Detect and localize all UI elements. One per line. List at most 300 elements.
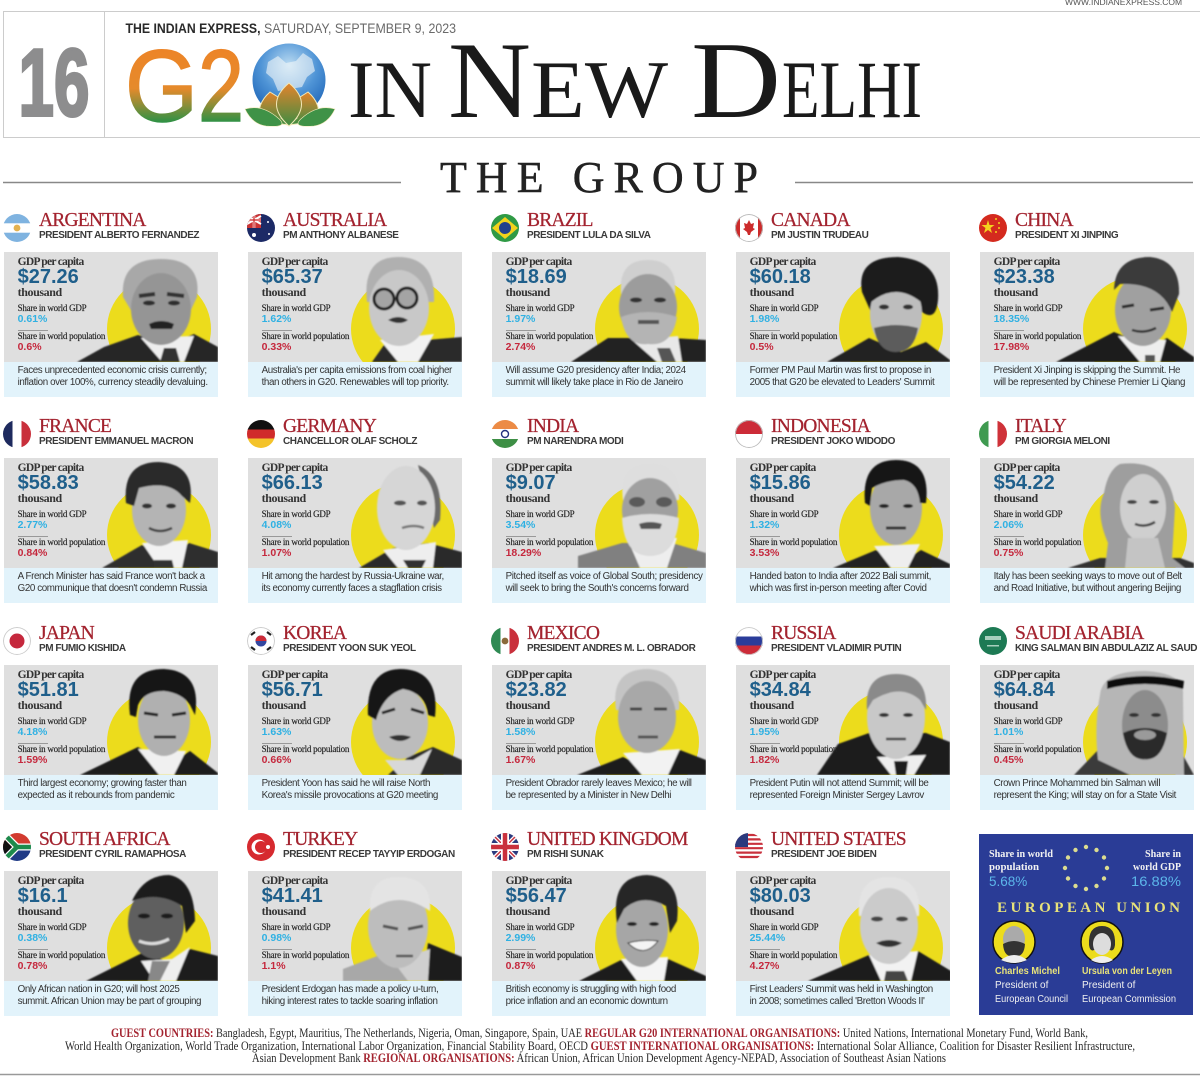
key figures: thousand [750,698,794,712]
note [492,362,706,397]
portrait: King Salman [980,665,1194,775]
key figures: 1.67% [506,754,535,766]
country name: ARGENTINA [39,210,146,230]
key figures: 3.53% [750,547,779,559]
flag: Korea [247,627,275,655]
icon: EU stars [1063,845,1109,891]
card: India [492,416,706,603]
key figures: GDP per capita [262,256,328,268]
portrait: Yoon [248,665,462,775]
key figures [506,871,616,981]
portrait: Charles Michel [993,921,1035,963]
key figures: 1.98% [750,313,779,325]
key figures: $64.84 [994,679,1055,701]
key figures: $15.86 [750,472,811,494]
leader: PRESIDENT EMMANUEL MACRON [39,436,193,447]
key figures: Share in world population [994,537,1081,547]
key figures: thousand [262,698,306,712]
stats panel [980,252,1194,362]
leader: PM ANTHONY ALBANESE [283,230,399,241]
key figures: 1.07% [262,547,291,559]
note [736,981,950,1016]
key figures: $54.22 [994,472,1055,494]
key figures: $18.69 [506,266,567,288]
key figures: Share in world population [18,331,105,341]
title: in New Delhi: EW [531,44,669,135]
key figures [506,665,616,775]
card: United Kingdom [488,829,728,1017]
stats panel [492,458,706,568]
portrait: Kishida [4,665,218,775]
key figures: 25.44% [750,932,785,944]
key figures: Share in world population [506,744,593,754]
key figures: Share in world GDP [18,716,86,726]
key figures: Share in world population [262,950,349,960]
leader: KING SALMAN BIN ABDULAZIZ AL SAUD [1015,643,1197,654]
key figures: GDP per capita [262,462,328,474]
key figures [262,462,350,559]
key figures: $80.03 [750,885,811,907]
key figures: 2.99% [506,932,535,944]
masthead [3,11,1200,140]
note [4,775,218,810]
portrait: Scholz [351,464,462,568]
key figures: Share in world population [750,537,837,547]
country name: AUSTRALIA [283,210,386,230]
leader: PRESIDENT LULA DA SILVA [527,230,651,241]
portrait: Biden [736,871,950,981]
key figures: GDP per capita [262,875,328,887]
key figures [750,256,838,353]
stats panel [4,458,218,568]
stats panel [248,458,462,568]
portrait: Obrador [492,665,706,775]
key figures: GDP per capita [750,669,816,681]
key figures [994,665,1104,775]
note: British economy is struggling with high food [506,984,676,994]
portrait: Meloni [980,458,1194,568]
key figures [750,665,860,775]
key figures: thousand [262,491,306,505]
note [736,362,950,397]
note: Handed baton to India after 2022 Bali summit, [750,570,931,582]
key figures: 18.35% [994,313,1029,325]
leader: PRESIDENT RECEP TAYYIP ERDOGAN [283,849,455,860]
country name: RUSSIA [771,622,836,644]
key figures: 1.62% [262,313,291,325]
key figures: Share in world population [506,950,593,960]
title: in New Delhi: D [691,20,781,140]
key figures: thousand [262,285,306,299]
title: in New Delhi: IN [348,44,432,135]
key figures: thousand [18,491,62,505]
key figures: thousand [750,904,794,918]
note [4,981,218,1016]
key figures: $23.82 [506,679,567,701]
G20 logo: 2 [198,29,244,140]
note: expected as it rebounds from pandemic [18,790,174,801]
key figures: Share in world GDP [750,716,818,726]
key figures: GDP per capita [750,462,816,474]
key figures: Share in world GDP [750,509,818,519]
key figures: thousand [506,698,550,712]
key figures: GDP per capita [750,875,816,887]
leader: PRESIDENT XI JINPING [1015,230,1118,241]
flag: United Kingdom [491,833,519,861]
note: which was first in-person meeting after Covid [750,583,927,594]
note: President Yoon has said he will raise North [262,778,430,788]
leader: PRESIDENT YOON SUK YEOL [283,643,416,654]
key figures: $56.47 [506,885,567,907]
note: President Obrador rarely leaves Mexico; he will [506,778,692,788]
key figures: Share in world population [994,744,1081,754]
key figures: 0.45% [994,754,1023,766]
card: China [979,210,1194,397]
stats panel [980,665,1194,775]
heading: European Union: EUROPEAN UNION [997,900,1180,916]
key figures: 4.18% [18,726,47,738]
card: Canada [735,210,950,397]
key figures [18,256,106,353]
key figures: 0.61% [18,313,47,325]
flag: Germany [247,420,275,448]
key figures: GDP per capita [994,462,1060,474]
key figures: $34.84 [750,679,811,701]
key figures: $16.1 [18,885,68,907]
card: Australia [247,210,462,397]
card: Italy [979,416,1194,603]
share in world GDP: world GDP [1133,861,1181,873]
key figures: $23.38 [994,266,1055,288]
share in world population: 5.68% [989,874,1027,889]
title: in New Delhi: ELHI [782,44,922,135]
caption: Charles Michel [995,966,1068,1005]
portrait: Sunak [492,871,706,981]
stats panel [248,252,462,362]
dateline: SATURDAY, SEPTEMBER 9, 2023 [264,21,456,36]
key figures: 1.82% [750,754,779,766]
key figures: Share in world GDP [262,509,330,519]
note [4,568,218,603]
key figures [506,462,594,559]
key figures: Share in world population [750,744,837,754]
card: Japan [0,623,240,811]
note [248,775,462,810]
key figures [750,871,860,981]
card: Germany [247,416,462,603]
note: Australia's per capita emissions from coal higher [262,364,452,376]
key figures: thousand [262,904,306,918]
stats panel [736,871,950,981]
key figures: 4.08% [262,519,291,531]
key figures: 1.59% [18,754,47,766]
leader: PRESIDENT VLADIMIR PUTIN [771,643,901,654]
key figures: 0.33% [262,341,291,353]
key figures: 1.32% [750,519,779,531]
leader: PRESIDENT ALBERTO FERNANDEZ [39,230,199,241]
key figures: Share in world population [262,537,349,547]
key figures: 2.77% [18,519,47,531]
note: Crown Prince Mohammed bin Salman will [994,778,1160,788]
key figures [994,458,1104,568]
key figures: 0.5% [750,341,774,353]
key figures: 1.63% [262,726,291,738]
flag: Mexico [491,627,519,655]
key figures: 0.6% [18,341,42,353]
key figures [262,256,350,353]
note: Italy has been seeking ways to move out of Belt [994,570,1182,582]
flag: Argentina [4,214,30,242]
share in world GDP: 16.88% [1131,873,1181,889]
note: than others in G20. Renewables will top priority. [262,377,449,388]
leader: PM FUMIO KISHIDA [39,643,126,654]
key figures [506,256,594,353]
stats panel [4,665,218,775]
key figures: Share in world GDP [262,922,330,932]
card: Mexico [488,623,728,811]
dateline: THE INDIAN EXPRESS, [126,21,260,36]
note: represented Foreign Minister Sergey Lavrov [750,790,924,801]
note [248,362,462,397]
note: in 2008; sometimes called 'Bretton Woods II' [750,996,925,1007]
flag: Japan [3,627,31,655]
stats panel [736,458,950,568]
key figures: 1.01% [994,726,1023,738]
country name: JAPAN [39,622,94,644]
key figures: thousand [18,698,62,712]
key figures: thousand [18,904,62,918]
key figures: 1.97% [506,313,535,325]
country name: INDONESIA [771,416,870,436]
key figures: Share in world population [262,331,349,341]
flag: India [492,420,518,448]
footer: guest countries and organisations: World Health Organization, World Trade Organization, International Labor Organization, Financial Stability Board, OECD GUEST INTERNATIONAL ORGANISATIONS: International Solar Alliance, Coalition for Disaster Resilient Infrastructure, [65,1039,1135,1053]
key figures: $66.13 [262,472,323,494]
portrait: Putin [736,665,950,775]
flag: Canada [735,214,763,242]
portrait: Xi [1056,256,1194,362]
key figures: $27.26 [18,266,79,288]
stats panel [492,665,706,775]
flag: China [979,214,1007,242]
card: Korea [244,623,484,811]
note: First Leaders' Summit was held in Washington [750,984,933,994]
key figures: 18.29% [506,547,541,559]
leader: PM JUSTIN TRUDEAU [771,230,868,241]
leader: PRESIDENT ANDRES M. L. OBRADOR [527,643,695,654]
leader: CHANCELLOR OLAF SCHOLZ [283,436,417,447]
key figures: $9.07 [506,472,556,494]
stats panel [248,665,462,775]
country name: ITALY [1015,416,1066,436]
note: its economy currently faces a stagflation crisis [262,583,442,594]
share in world GDP: Share in [1145,848,1181,860]
key figures: Share in world GDP [18,509,86,519]
card: Argentina [4,210,218,397]
key figures: 0.84% [18,547,47,559]
page number: 16 [18,30,90,136]
note: and Road Initiative, but without angering Beijing [994,583,1181,594]
note: Third largest economy; growing faster than [18,778,186,788]
footer: guest countries and organisations [0,1022,1200,1077]
key figures: Share in world population [18,950,105,960]
key figures: Share in world GDP [994,716,1062,726]
key figures: Share in world population [506,537,593,547]
key figures: GDP per capita [506,256,572,268]
title: in New Delhi: N [448,20,531,140]
note [492,568,706,603]
key figures: Share in world population [750,950,837,960]
share in world population [989,848,1053,889]
key figures: Share in world population [262,744,349,754]
caption: Ursula von der Leyen: Ursula von der Leyen [1082,966,1172,977]
card: Turkey [244,829,484,1017]
flag: France [3,420,31,448]
country name: GERMANY [283,416,376,436]
key figures: 1.1% [262,960,286,972]
note [4,362,218,397]
stats panel [736,252,950,362]
key figures [18,871,128,981]
key figures: Share in world GDP [750,922,818,932]
flag: Russia [735,627,763,655]
note [492,775,706,810]
leader: PM RISHI SUNAK [527,849,603,860]
key figures: 1.58% [506,726,535,738]
note [980,775,1194,810]
country name: TURKEY [283,828,357,850]
footer: guest countries and organisations: Asian Development Bank REGIONAL ORGANISATIONS: African Union, African Union Development Agency-NEPAD, Association of Southeast Asian Nations [252,1051,946,1065]
note: President Erdogan has made a policy u-turn, [262,984,438,994]
G20 logo: G [125,29,198,140]
share in world GDP [1131,848,1181,889]
flag: Australia [247,214,275,242]
key figures: GDP per capita [506,875,572,887]
key figures [262,871,372,981]
dateline [126,21,456,36]
key figures: thousand [994,698,1038,712]
key figures: Share in world GDP [506,509,574,519]
note: will seek to bring the South's concerns forward [506,583,689,594]
key figures: Share in world GDP [994,303,1062,313]
key figures [18,462,106,559]
note: will be represented by Chinese Premier Li Qiang [994,377,1185,388]
key figures: 3.54% [506,519,535,531]
portrait: Lula [570,260,706,362]
card: Brazil [491,210,706,397]
key figures: Share in world GDP [262,303,330,313]
key figures: Share in world population [18,744,105,754]
key figures: GDP per capita [18,256,84,268]
note: be represented by a Minister in New Delhi [506,790,671,801]
leader: PRESIDENT JOE BIDEN [771,849,876,860]
card: South Africa [0,829,240,1017]
key figures: 0.66% [262,754,291,766]
key figures: thousand [750,285,794,299]
portrait: Ramaphosa [4,871,218,981]
key figures: Share in world population [750,331,837,341]
note: Only African nation in G20; will host 2025 [18,984,179,994]
country name: UNITED KINGDOM [527,828,687,850]
leader: PM GIORGIA MELONI [1015,436,1110,447]
note: Korea's missile provocations at G20 meeting [262,790,438,801]
key figures: Share in world GDP [262,716,330,726]
note: Pitched itself as voice of Global South; presidency [506,570,702,582]
panel: European Union [979,834,1193,1015]
note [980,362,1194,397]
stats panel [4,871,218,981]
key figures: Share in world GDP [750,303,818,313]
note: price inflation and an economic downturn [506,996,668,1007]
flag: South Africa [3,833,31,861]
key figures: 0.78% [18,960,47,972]
note: President Xi Jinping is skipping the Summit. He [994,364,1180,376]
key figures: 17.98% [994,341,1029,353]
note: hiking interest rates to tackle soaring inflation [262,996,438,1007]
caption: Charles Michel: President of [995,980,1049,991]
key figures: Share in world population [18,537,105,547]
leader: PRESIDENT CYRIL RAMAPHOSA [39,849,186,860]
stats panel [248,871,462,981]
key figures: 0.75% [994,547,1023,559]
key figures: $51.81 [18,679,79,701]
key figures: GDP per capita [994,256,1060,268]
stats panel [492,871,706,981]
country name: BRAZIL [527,210,593,230]
note: G20 communique that doesn't condemn Russia [18,583,207,594]
share in world population: Share in world [989,848,1053,860]
caption: Charles Michel: European Council [995,994,1068,1005]
key figures: $41.41 [262,885,323,907]
key figures: GDP per capita [18,462,84,474]
portrait: Modi [577,477,706,568]
key figures: 0.87% [506,960,535,972]
title: in New Delhi [348,20,922,141]
flag: Italy [979,420,1007,448]
key figures: 4.27% [750,960,779,972]
card: Russia [732,623,972,811]
country name: CANADA [771,210,850,230]
key figures: GDP per capita [994,669,1060,681]
note [736,775,950,810]
key figures: 2.06% [994,519,1023,531]
stats panel [4,252,218,362]
portrait: Trudeau [826,256,950,362]
key figures: thousand [994,285,1038,299]
key figures: $65.37 [262,266,323,288]
caption: Ursula von der Leyen [1082,966,1176,1005]
key figures [994,256,1082,353]
note: 2005 that G20 be elevated to Leaders' Summit [750,377,934,388]
note: summit. African Union may be part of grouping [18,996,201,1007]
footer: guest countries and organisations: GUEST COUNTRIES: Bangladesh, Egypt, Mauritius, The Netherlands, Nigeria, Oman, Singapore, Spain, UAE REGULAR G20 INTERNATIONAL ORGANISATIONS: United Nations, International Monetary Fund, World Bank, [111,1026,1088,1040]
key figures: GDP per capita [18,669,84,681]
caption: Ursula von der Leyen: European Commission [1082,994,1176,1005]
key figures: thousand [506,491,550,505]
caption: Charles Michel: Charles Michel [995,966,1060,977]
portrait: Albanese [351,256,462,362]
key figures: GDP per capita [18,875,84,887]
note [248,981,462,1016]
key figures: GDP per capita [750,256,816,268]
G20 logo [125,29,335,143]
stats panel [980,458,1194,568]
portrait: Ursula von der Leyen [1081,921,1123,963]
country name: KOREA [283,622,346,644]
key figures: 0.38% [18,932,47,944]
key figures [750,462,838,559]
note: Hit among the hardest by Russia-Ukraine war, [262,570,444,582]
